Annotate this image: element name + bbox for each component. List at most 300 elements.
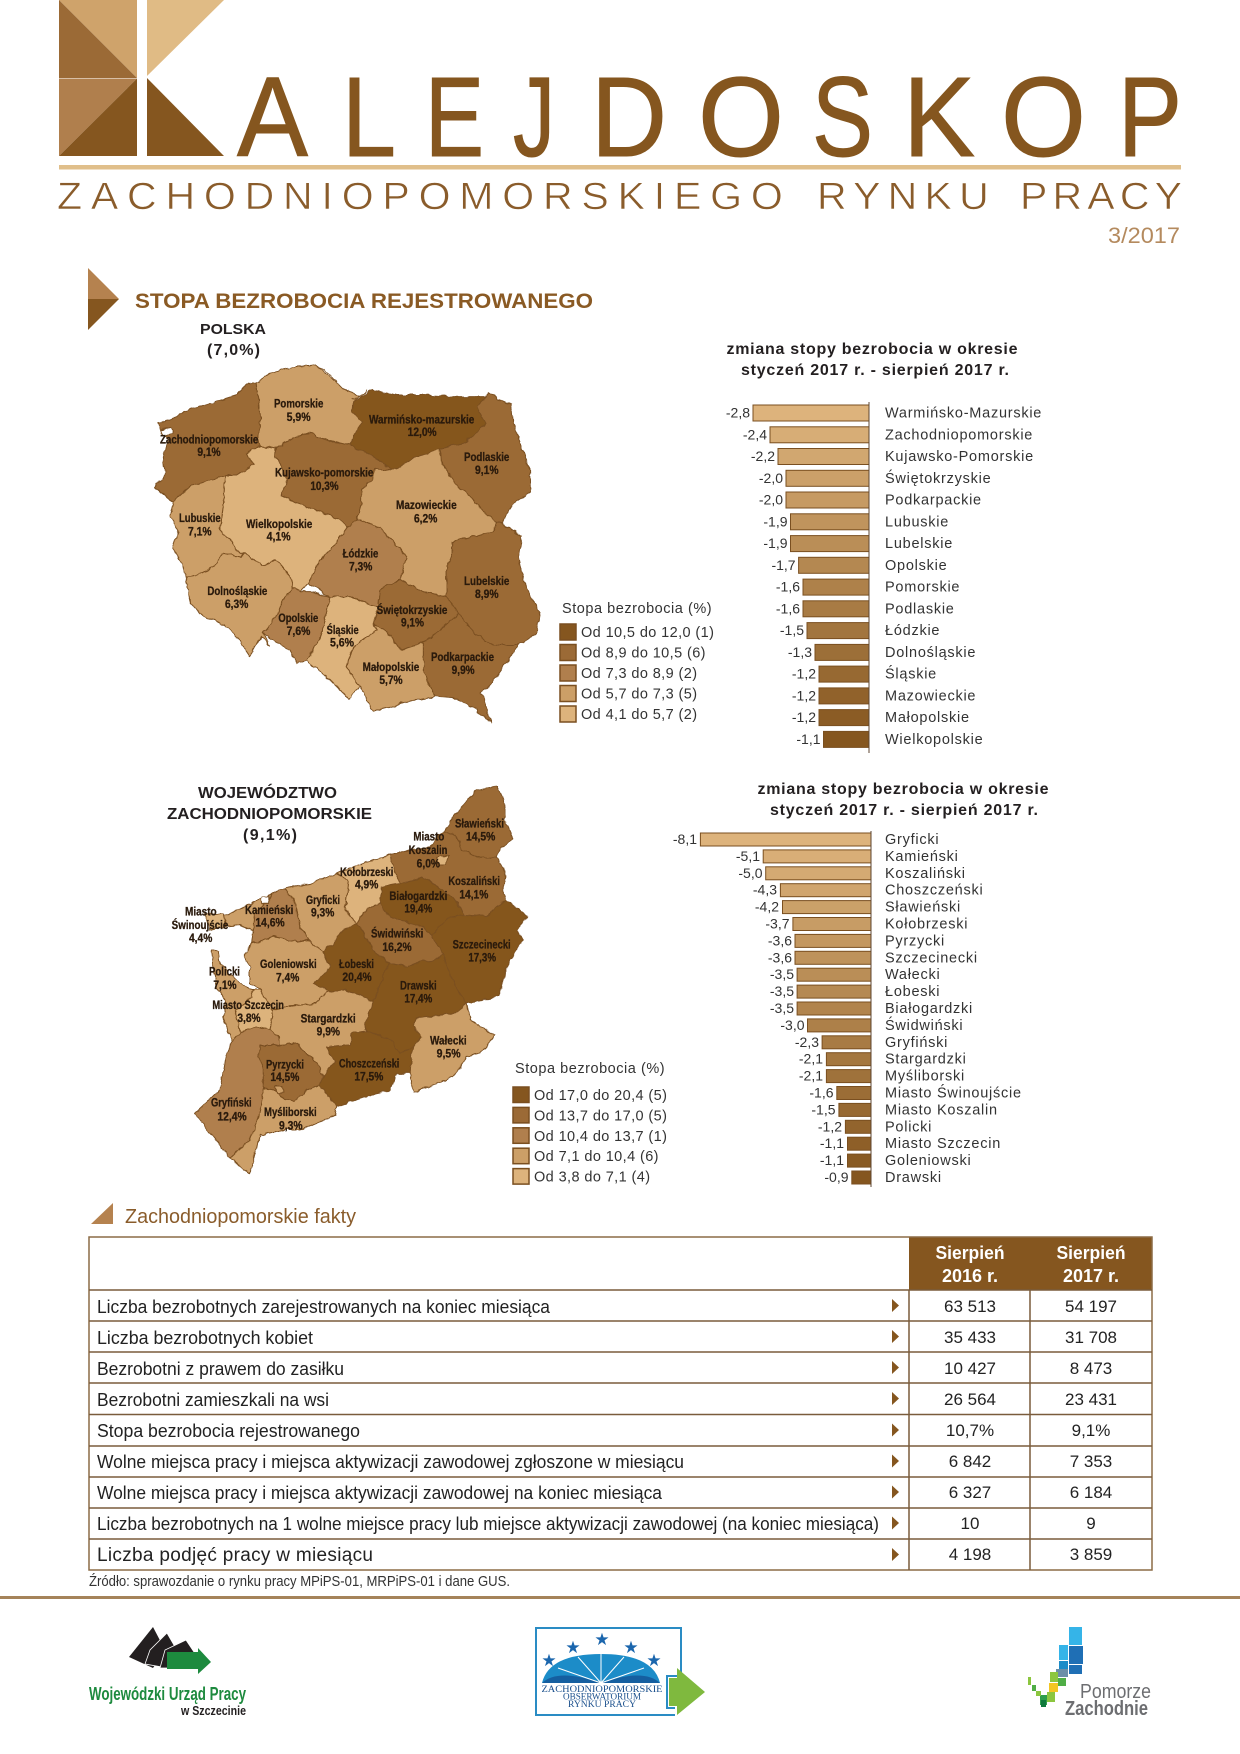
region: Podlaskie <box>440 392 531 523</box>
bar: Miasto Szczecin: -1,1 <box>820 1135 844 1151</box>
legend: Poland unemployment rate: Od 8,9 do 10,5 (6) <box>581 646 706 662</box>
region: Pyrzycki <box>258 1043 323 1102</box>
section icon: facts triangle <box>91 1203 113 1224</box>
bar: Mazowieckie <box>792 687 976 704</box>
region: Lobeski <box>313 923 390 1002</box>
bar: Pyrzycki: Pyrzycki <box>885 933 945 949</box>
bar: Mysliborski: Myśliborski <box>885 1069 965 1085</box>
bar: Swidwinski: Świdwiński <box>885 1016 963 1034</box>
bar: Koszalinski: Koszaliński <box>885 866 966 882</box>
bar: Gryfinski <box>795 1034 948 1051</box>
row: jobs taken <box>97 1545 1112 1566</box>
section heading: facts: Zachodniopomorskie fakty <box>125 1206 356 1228</box>
row: with benefits: 8 473 <box>1070 1359 1112 1378</box>
label: Kolobrzeski <box>340 865 393 891</box>
masthead logo: kaleidoscope K <box>59 0 224 156</box>
row: unemployed per vacancy: Liczba bezrobotnych na 1 wolne miejsce pracy lub miejsce aktywizacji zawodowej (na koniec miesiąca) <box>97 1514 879 1534</box>
heading: Wojewodztwo zachodniopomorskie: (9,1%) <box>243 827 297 844</box>
title: KALEJDOSKOP: D <box>591 54 667 180</box>
label: Miasto Swinoujscie: 4,4% <box>189 931 213 945</box>
label: Slawienski <box>455 816 504 844</box>
label: Choszczenski: Choszczeński <box>339 1056 399 1070</box>
label: Miasto Szczecin: Miasto Szczecin <box>212 998 284 1012</box>
bar: Lodzkie: -1,5 <box>780 622 804 638</box>
bar: Drawski: -0,9 <box>824 1169 849 1185</box>
row: with benefits: Bezrobotni z prawem do zasiłku <box>97 1359 344 1379</box>
bar: Pyrzycki <box>768 932 945 949</box>
label: Policki: Policki <box>209 965 240 979</box>
bar: Stargardzki <box>799 1051 967 1068</box>
row: vacancies end of month <box>97 1483 1112 1503</box>
logo: Zachodniopomorskie Obserwatorium Rynku Pracy <box>536 1628 705 1715</box>
bar: Podlaskie: Podlaskie <box>885 601 955 617</box>
bar: Koszalinski: -5,0 <box>738 865 763 881</box>
bar: Lodzkie: Łódzkie <box>885 623 940 639</box>
region: Walecki <box>410 1003 495 1092</box>
row: with benefits <box>97 1359 1112 1379</box>
label: Gryficki <box>306 893 340 920</box>
bar: Kolobrzeski: Kołobrzeski <box>885 916 968 932</box>
bar: Opolskie: Opolskie <box>885 558 947 574</box>
legend: Poland unemployment rate: Od 4,1 do 5,7 (2) <box>581 707 697 723</box>
label: Wielkopolskie: Wielkopolskie <box>246 517 313 531</box>
bar: Bialogardzki <box>770 1000 973 1017</box>
subtitle: ZACHODNIOPOMORSKIEGO <box>57 175 783 218</box>
bar: Szczecinecki <box>768 949 978 966</box>
label: Malopolskie <box>363 660 420 687</box>
heading: Polska: POLSKA <box>200 321 266 338</box>
row: unemployment rate: 10,7% <box>946 1421 994 1440</box>
region: Podkarpackie <box>423 613 518 723</box>
label: Opolskie: Opolskie <box>278 611 319 625</box>
bar: Pyrzycki: -3,6 <box>768 932 792 948</box>
subtitle: RYNKU <box>817 175 989 218</box>
label: Slawienski: Sławieński <box>455 816 504 830</box>
bar: Opolskie <box>771 557 947 574</box>
label: Dolnoslaskie: Dolnośląskie <box>207 584 268 598</box>
bar: Miasto Swinoujscie: -1,6 <box>809 1084 834 1100</box>
label: Kujawsko-pomorskie <box>275 466 374 493</box>
label: Szczecinecki: 17,3% <box>468 950 496 964</box>
label: Gryficki: Gryficki <box>306 893 340 907</box>
table header: months: Sierpień <box>936 1243 1004 1263</box>
bar: Swietokrzyskie <box>759 469 991 487</box>
bar: Goleniowski <box>820 1152 971 1169</box>
label: Bialogardzki <box>389 889 447 916</box>
region: Slaskie <box>307 597 378 698</box>
label: Drawski: 17,4% <box>404 991 433 1005</box>
row: vacancies end of month: Wolne miejsca pracy i miejsca aktywizacji zawodowej na koniec miesiąca <box>97 1483 663 1503</box>
chart title: West Pomeranian change <box>758 781 1049 819</box>
logo: Zachodniopomorskie Obserwatorium Rynku Pracy: RYNKU PRACY <box>568 1700 636 1710</box>
bar: Malopolskie: -1,2 <box>792 709 816 725</box>
bar: Wielkopolskie: Wielkopolskie <box>885 732 983 748</box>
bar: Podlaskie: -1,6 <box>776 600 800 616</box>
bar: Miasto Koszalin: Miasto Koszalin <box>885 1102 998 1118</box>
heading: Wojewodztwo zachodniopomorskie: WOJEWÓDZTWO <box>198 783 337 802</box>
bar: Bialogardzki: -3,5 <box>770 1000 794 1016</box>
bar: Slawienski: -4,2 <box>755 899 779 915</box>
row: jobs taken: Liczba podjęć pracy w miesiącu <box>97 1545 373 1566</box>
region: Goleniowski <box>243 937 330 1010</box>
title: KALEJDOSKOP: J <box>513 54 555 180</box>
bar: Podkarpackie <box>759 492 982 508</box>
label: Miasto Koszalin <box>409 830 447 870</box>
bar: Dolnoslaskie: -1,3 <box>788 644 812 660</box>
label: Malopolskie: Małopolskie <box>363 660 420 674</box>
title: KALEJDOSKOP: K <box>903 54 975 180</box>
bar: Kujawsko-Pomorskie: Kujawsko-Pomorskie <box>885 449 1034 465</box>
region: Swietokrzyskie <box>373 580 458 650</box>
label: Choszczenski <box>339 1056 399 1083</box>
table header: months: 2017 r. <box>1063 1266 1119 1286</box>
region: Gryficki <box>285 873 357 952</box>
legend: West Pomeranian unemployment rate: Od 17,0 do 20,4 (5) <box>534 1088 667 1104</box>
label: Lubelskie: Lubelskie <box>464 574 510 588</box>
label: Walecki: Wałecki <box>430 1034 467 1048</box>
region: Pomorskie <box>256 366 363 448</box>
section heading: STOPA BEZROBOCIA REJESTROWANEGO <box>135 290 593 313</box>
region: Zachodniopomorskie <box>155 383 260 502</box>
label: Kujawsko-pomorskie: Kujawsko-pomorskie <box>275 466 374 480</box>
region: Pyrzycki inner town <box>275 1086 284 1093</box>
map: West Pomeranian counties <box>172 786 527 1173</box>
label: Lodzkie: Łódzkie <box>343 547 379 561</box>
region: Swidwinski <box>357 903 443 967</box>
row: unemployed women: Liczba bezrobotnych kobiet <box>97 1328 313 1348</box>
label: Wielkopolskie <box>246 517 313 544</box>
region: Bialogardzki <box>380 877 465 937</box>
title: KALEJDOSKOP <box>237 54 1182 180</box>
bar: Choszczenski <box>753 882 983 899</box>
logo: Zachodniopomorskie Obserwatorium Rynku Pracy: ★ <box>565 1638 581 1657</box>
row: vacancies end of month: 6 327 <box>949 1483 991 1502</box>
chart title: Poland change: zmiana stopy bezrobocia w okresie <box>726 341 1018 358</box>
bar chart: West Pomeranian change by county <box>673 831 1022 1187</box>
label: Choszczenski: 17,5% <box>354 1069 384 1083</box>
region: Kamienski coast <box>223 893 273 930</box>
bar: Koszalinski <box>738 865 966 882</box>
label: Lubelskie: 8,9% <box>475 587 499 601</box>
bar: Policki: Policki <box>885 1119 932 1135</box>
logo: Pomorze Zachodnie: Pomorze <box>1080 1681 1151 1703</box>
label: Wielkopolskie: 4,1% <box>267 530 291 544</box>
legend: West Pomeranian unemployment rate: Od 7,1 do 10,4 (6) <box>534 1149 659 1165</box>
bar: Szczecinecki: Szczecinecki <box>885 950 978 966</box>
row: vacancies reported: 6 842 <box>949 1452 991 1471</box>
legend: Poland unemployment rate: Od 5,7 do 7,3 (5) <box>581 686 697 702</box>
label: Podkarpackie: 9,9% <box>452 663 475 677</box>
legend: West Pomeranian unemployment rate: Od 10,4 do 13,7 (1) <box>534 1129 667 1145</box>
region: Slawienski <box>445 786 513 858</box>
label: Pomorskie: Pomorskie <box>274 397 324 411</box>
bar: Miasto Koszalin: -1,5 <box>811 1101 836 1117</box>
bar: Kolobrzeski <box>765 916 968 932</box>
bar: Zachodniopomorskie: Zachodniopomorskie <box>885 427 1033 443</box>
legend: Poland unemployment rate: Od 7,3 do 8,9 (2) <box>581 666 697 682</box>
title: KALEJDOSKOP: A <box>237 54 309 180</box>
row: unemployed women <box>97 1328 1117 1348</box>
label: Miasto Szczecin <box>212 998 284 1025</box>
label: Pyrzycki: Pyrzycki <box>266 1057 304 1071</box>
label: Stargardzki: 9,9% <box>317 1025 340 1039</box>
region: Malopolskie <box>347 623 435 712</box>
heading: Wojewodztwo zachodniopomorskie <box>167 783 372 844</box>
bar: Miasto Szczecin <box>820 1135 1001 1152</box>
label: Policki <box>209 965 240 992</box>
logo: Zachodniopomorskie Obserwatorium Rynku Pracy: ★ <box>623 1638 639 1657</box>
label: Goleniowski <box>260 957 317 984</box>
row: unemployed per vacancy: 10 <box>961 1514 979 1533</box>
bar: Lubuskie: -1,9 <box>763 513 788 529</box>
bar: Lodzkie <box>780 622 940 639</box>
region: Lodzkie <box>308 520 407 607</box>
bar: Goleniowski: -1,1 <box>820 1152 844 1168</box>
label: Policki: 7,1% <box>213 978 237 992</box>
bar: Pomorskie <box>776 579 960 596</box>
region: Warminsko-mazurskie <box>350 390 487 470</box>
bar: Kujawsko-Pomorskie: -2,2 <box>751 448 775 464</box>
label: Goleniowski: 7,4% <box>276 970 300 984</box>
bar chart: Poland change by voivodeship <box>726 402 1042 753</box>
label: Koszalinski: 14,1% <box>459 887 489 901</box>
label: Gryficki: 9,3% <box>311 906 335 920</box>
label: Swidwinski: 16,2% <box>382 940 412 954</box>
bar: Choszczenski: -4,3 <box>753 882 777 898</box>
logo: Zachodniopomorskie Obserwatorium Rynku Pracy: ★ <box>594 1630 610 1649</box>
row: vacancies reported: Wolne miejsca pracy i miejsca aktywizacji zawodowej zgłoszone w miesiącu <box>97 1452 684 1472</box>
row: registered unemployed: Liczba bezrobotnych zarejestrowanych na koniec miesiąca <box>97 1297 551 1317</box>
heading: Polska <box>200 321 266 359</box>
label: Podlaskie: Podlaskie <box>464 450 510 464</box>
label: Dolnoslaskie <box>207 584 268 611</box>
label: Miasto Swinoujscie: Miasto <box>185 905 217 919</box>
label: Kamienski <box>245 903 293 930</box>
label: Slawienski: 14,5% <box>466 830 496 844</box>
label: Kamienski: Kamieński <box>245 903 293 917</box>
label: Drawski <box>400 978 437 1005</box>
masthead rule <box>59 165 1181 170</box>
subtitle <box>57 175 1182 218</box>
row: registered unemployed <box>97 1297 1117 1317</box>
bar: Warminsko-Mazurskie: -2,8 <box>726 404 750 420</box>
label: Dolnoslaskie: 6,3% <box>225 597 249 611</box>
region: Kujawsko-pomorskie <box>275 433 393 527</box>
bar: Walecki: Wałecki <box>885 967 940 983</box>
label: Szczecinecki <box>453 937 511 964</box>
row: vacancies reported <box>97 1452 1112 1472</box>
map labels: West Pomeranian counties <box>172 816 511 1132</box>
bar: Swietokrzyskie: Świętokrzyskie <box>885 469 991 487</box>
chart title: West Pomeranian change: zmiana stopy bezrobocia w okresie <box>758 781 1049 798</box>
map: Poland voivodeships <box>155 366 540 723</box>
label: Swidwinski <box>371 925 423 954</box>
bar: Lobeski <box>770 983 940 1000</box>
bar: Mazowieckie: -1,2 <box>792 687 816 703</box>
label: Miasto Swinoujscie <box>172 905 229 945</box>
row: rural residents: 26 564 <box>944 1390 996 1409</box>
row: with benefits: 10 427 <box>944 1359 996 1378</box>
label: Podlaskie: 9,1% <box>475 463 499 477</box>
section icon: triangle <box>88 268 119 330</box>
bar: Kamienski: -5,1 <box>736 848 760 864</box>
bar: Drawski <box>824 1169 942 1186</box>
logo: Zachodniopomorskie Obserwatorium Rynku Pracy: OBSERWATORIUM <box>563 1692 642 1702</box>
label: Lodzkie: 7,3% <box>349 560 373 574</box>
bar: Miasto Szczecin: Miasto Szczecin <box>885 1136 1001 1152</box>
legend: West Pomeranian unemployment rate: Od 3,8 do 7,1 (4) <box>534 1170 650 1186</box>
region: Miasto Koszalin <box>437 855 448 865</box>
label: Lubuskie: 7,1% <box>188 525 212 539</box>
label: Zachodniopomorskie: 9,1% <box>197 445 221 459</box>
region: Gryfinski <box>195 1027 280 1158</box>
label: Kolobrzeski: 4,9% <box>355 877 379 891</box>
label: Podkarpackie <box>431 650 494 677</box>
label: Podkarpackie: Podkarpackie <box>431 650 494 664</box>
bar: Warminsko-Mazurskie <box>726 404 1042 422</box>
region: Hel Peninsula <box>317 367 336 381</box>
label: Slaskie: Śląskie <box>327 622 359 637</box>
bar: Miasto Koszalin <box>811 1101 998 1118</box>
row: unemployed women: 35 433 <box>944 1328 996 1347</box>
label: Miasto Koszalin: Koszalin <box>409 843 447 857</box>
title: KALEJDOSKOP: E <box>425 54 484 180</box>
region: Dolnoslaskie <box>187 553 293 657</box>
label: Walecki: 9,5% <box>437 1047 461 1061</box>
label: Bialogardzki: Białogardzki <box>389 889 447 903</box>
bar: Podkarpackie: Podkarpackie <box>885 492 982 508</box>
bar: Podlaskie <box>776 600 955 617</box>
row: unemployed women: 31 708 <box>1065 1328 1117 1347</box>
region: Szczecinecki <box>432 900 527 1003</box>
region: Stargardzki <box>270 990 373 1077</box>
region: Wielkopolskie <box>220 446 348 592</box>
region: Mazowieckie <box>357 448 497 597</box>
label: Swidwinski: Świdwiński <box>371 925 423 940</box>
bar: Mysliborski: -2,1 <box>799 1068 823 1084</box>
row: rural residents: 23 431 <box>1065 1390 1117 1409</box>
label: Kamienski: 14,6% <box>255 916 285 930</box>
label: Goleniowski: Goleniowski <box>260 957 317 971</box>
region: Szczecin Lagoon <box>161 427 173 436</box>
table header: months <box>909 1237 1152 1290</box>
bar: Drawski: Drawski <box>885 1170 942 1186</box>
bar: Szczecinecki: -3,6 <box>768 949 792 965</box>
label: Koszalinski <box>448 874 500 901</box>
label: Mysliborski: 9,3% <box>279 1118 303 1132</box>
region: Vistula Spit <box>352 390 367 399</box>
row: vacancies reported: 7 353 <box>1070 1452 1112 1471</box>
bar: Gryficki <box>673 831 939 848</box>
label: Miasto Szczecin: 3,8% <box>237 1011 261 1025</box>
bar: Malopolskie <box>792 709 970 726</box>
bar: Dolnoslaskie: Dolnośląskie <box>885 645 976 661</box>
label: Warminsko-mazurskie: 12,0% <box>408 425 437 439</box>
table header: months: Sierpień <box>1056 1243 1126 1263</box>
row: unemployment rate: Stopa bezrobocia rejestrowanego <box>97 1421 360 1441</box>
label: Malopolskie: 5,7% <box>379 673 403 687</box>
logo: Zachodniopomorskie Obserwatorium Rynku Pracy: ★ <box>646 1651 662 1670</box>
bar: Miasto Swinoujscie: Miasto Świnoujście <box>885 1084 1022 1102</box>
logo: Wojewodzki Urzad Pracy <box>89 1627 246 1718</box>
bar: Swietokrzyskie: -2,0 <box>759 470 783 486</box>
label: Walecki <box>430 1034 467 1061</box>
bar: Lobeski: -3,5 <box>770 983 794 999</box>
bar: Policki <box>818 1118 932 1135</box>
bar: Lubuskie: Lubuskie <box>885 514 949 530</box>
row: rural residents: Bezrobotni zamieszkali na wsi <box>97 1390 329 1410</box>
legend: West Pomeranian unemployment rate: Od 13,7 do 17,0 (5) <box>534 1108 667 1124</box>
label: Bialogardzki: 19,4% <box>404 902 433 916</box>
subtitle: PRACY <box>1020 175 1182 218</box>
label: Gryfinski: 12,4% <box>217 1110 247 1124</box>
legend: West Pomeranian unemployment rate <box>513 1061 667 1186</box>
logo: Zachodniopomorskie Obserwatorium Rynku Pracy: ZACHODNIOPOMORSKIE <box>542 1685 663 1695</box>
label: Lubuskie: Lubuskie <box>179 511 221 525</box>
label: Lobeski: 20,4% <box>342 970 372 984</box>
legend: Poland unemployment rate: Od 10,5 do 12,0 (1) <box>581 625 714 641</box>
label: Slaskie <box>327 622 359 650</box>
label: Mazowieckie: Mazowieckie <box>396 498 457 512</box>
row: unemployment rate <box>97 1421 1110 1441</box>
row: registered unemployed: 63 513 <box>944 1297 996 1316</box>
label: Miasto Koszalin: 6,0% <box>417 856 440 870</box>
label: Gryfinski: Gryfiński <box>211 1096 252 1110</box>
label: Kujawsko-pomorskie: 10,3% <box>310 479 339 493</box>
bar: Gryficki: -8,1 <box>673 831 697 847</box>
title: KALEJDOSKOP: S <box>812 54 873 180</box>
label: Pyrzycki: 14,5% <box>270 1070 300 1084</box>
label: Mazowieckie <box>396 498 457 525</box>
row: jobs taken: 3 859 <box>1070 1545 1112 1564</box>
title: KALEJDOSKOP: O <box>698 54 784 180</box>
legend: Poland unemployment rate <box>560 601 714 723</box>
label: Lobeski <box>339 957 374 984</box>
bar: Stargardzki: Stargardzki <box>885 1052 967 1068</box>
logo: Zachodniopomorskie Obserwatorium Rynku Pracy: ★ <box>541 1651 557 1670</box>
chart title: West Pomeranian change: styczeń 2017 r. - sierpień 2017 r. <box>770 802 1038 819</box>
bar: Malopolskie: Małopolskie <box>885 710 970 726</box>
label: Kolobrzeski: Kołobrzeski <box>340 865 393 879</box>
region: Policki <box>212 950 260 1042</box>
label: Pomorskie <box>274 397 324 424</box>
source note: Źródło: sprawozdanie o rynku pracy MPiPS-01, MRPiPS-01 i dane GUS. <box>89 1573 510 1590</box>
row: jobs taken: 4 198 <box>949 1545 991 1564</box>
bar: Policki: -1,2 <box>818 1118 842 1134</box>
region: Kamienski <box>252 888 308 943</box>
label: Pyrzycki <box>266 1057 304 1084</box>
label: Szczecinecki: Szczecinecki <box>453 937 511 951</box>
region: Drawski <box>365 953 467 1053</box>
title: KALEJDOSKOP: P <box>1118 54 1182 180</box>
heading: Wojewodztwo zachodniopomorskie: ZACHODNIOPOMORSKIE <box>167 806 372 823</box>
logo: Pomorze Zachodnie <box>1028 1627 1151 1720</box>
label: Swietokrzyskie: Świętokrzyskie <box>377 602 448 617</box>
bar: Kamienski: Kamieński <box>885 849 959 865</box>
label: Mazowieckie: 6,2% <box>414 511 438 525</box>
bar: Slawienski: Sławieński <box>885 900 961 916</box>
label: Zachodniopomorskie <box>160 432 259 459</box>
chart title: Poland change <box>726 341 1018 379</box>
bar: Lubuskie <box>763 513 949 530</box>
row: unemployed per vacancy: 9 <box>1086 1514 1096 1533</box>
region: Miasto Szczecin <box>235 990 273 1032</box>
map labels: Poland <box>160 397 510 687</box>
region: Choszczenski <box>319 1032 413 1107</box>
region: Lubelskie <box>447 523 540 645</box>
bar: Stargardzki: -2,1 <box>799 1051 823 1067</box>
label: Miasto Swinoujscie: Świnoujście <box>172 917 229 932</box>
